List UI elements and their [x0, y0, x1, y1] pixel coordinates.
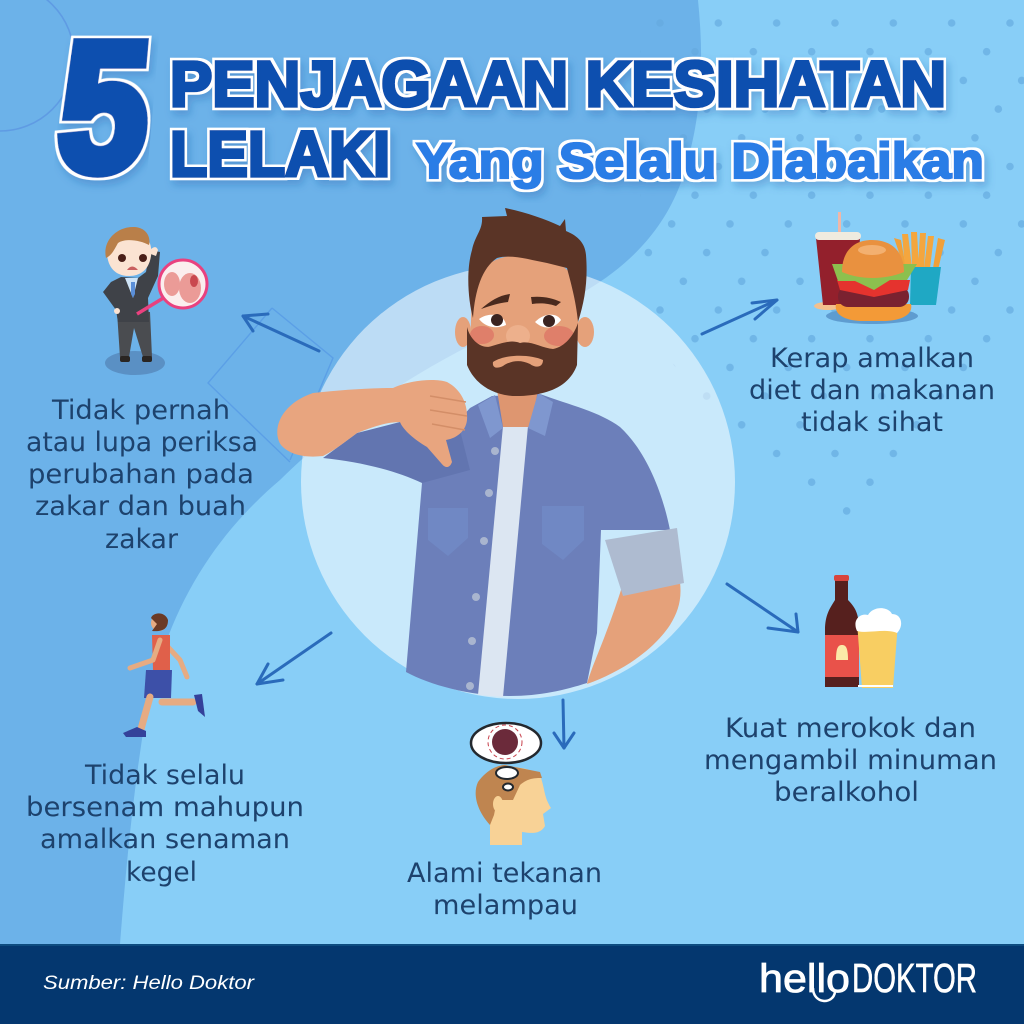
face — [470, 256, 579, 374]
text: testicle check: zakar dan buah — [35, 491, 246, 522]
text: unhealthy diet: tidak sihat — [801, 407, 943, 438]
hair — [476, 765, 542, 825]
burger — [836, 304, 911, 321]
arrow: to food — [702, 300, 777, 334]
pockets — [428, 508, 468, 556]
arrow: to stress — [554, 700, 574, 748]
t-shirt — [478, 426, 528, 697]
beard — [467, 323, 578, 396]
illustration: man thumbs down — [277, 208, 684, 697]
text: unhealthy diet: Kerap amalkan — [770, 343, 974, 374]
text: smoking and alcohol: Kuat merokok dan — [725, 713, 976, 744]
text: exercise: bersenam mahupun — [26, 792, 304, 823]
subheading: Yang Selalu Diabaikan — [416, 133, 984, 189]
text: testicle check: Tidak pernah — [51, 395, 230, 426]
central circle — [301, 265, 735, 699]
text: stress — [407, 858, 602, 921]
text: exercise: kegel — [126, 857, 197, 888]
cuff — [605, 528, 684, 596]
drink — [838, 212, 841, 236]
heading line 2: LELAKI — [170, 118, 390, 190]
collar — [478, 393, 553, 438]
decorative diamond outline — [208, 308, 333, 462]
head — [107, 230, 151, 276]
numeral 5: 5 — [52, 4, 157, 209]
source credit: Sumber: Hello Doktor — [43, 973, 255, 994]
icon: fast food — [814, 212, 945, 324]
trousers — [117, 312, 152, 357]
neck — [497, 390, 538, 427]
text: exercise — [26, 760, 304, 888]
buttons — [466, 447, 499, 690]
eyes — [479, 315, 506, 327]
text: unhealthy diet — [749, 343, 995, 438]
ears — [455, 317, 471, 347]
small bubbles — [496, 767, 518, 779]
face — [479, 767, 551, 845]
mouth — [493, 356, 543, 368]
magnifier — [137, 297, 165, 314]
text: testicle check — [26, 395, 258, 555]
fist fingers — [430, 396, 467, 430]
icon: stressed head — [471, 723, 551, 845]
text: testicle check: atau lupa periksa — [26, 427, 258, 458]
text: stress: Alami tekanan — [407, 858, 602, 889]
shirt — [406, 394, 670, 696]
icon: beer bottle and glass — [825, 575, 901, 688]
eyebrows — [481, 294, 561, 309]
text: exercise: Tidak selalu — [84, 760, 245, 791]
text: testicle check: perubahan pada — [28, 459, 254, 490]
logo — [759, 955, 977, 1001]
arrow: to exercise — [257, 633, 331, 684]
text: smoking and alcohol: mengambil minuman — [704, 745, 997, 776]
footer bar — [0, 944, 1024, 1024]
right forearm — [587, 582, 681, 684]
text: exercise: amalkan senaman — [40, 824, 290, 855]
left sleeve — [323, 422, 470, 483]
logo: DOKTOR — [852, 955, 977, 1001]
hair — [468, 208, 587, 322]
icon: running man — [123, 613, 205, 737]
cheeks — [470, 326, 494, 344]
arrow: to testicle check — [243, 314, 319, 351]
heading line 1: PENJAGAAN KESIHATAN — [170, 48, 946, 120]
text: smoking and alcohol — [704, 713, 997, 808]
text: testicle check: zakar — [105, 524, 179, 555]
jacket — [103, 250, 160, 322]
text: unhealthy diet: diet dan makanan — [749, 375, 995, 406]
fries — [894, 238, 945, 270]
text: smoking and alcohol: beralkohol — [774, 777, 919, 808]
left forearm and fist — [277, 380, 467, 467]
icon: worried man with magnifier — [103, 227, 207, 375]
arrow: to alcohol — [727, 584, 798, 632]
text: stress: melampau — [433, 890, 578, 921]
thought bubble — [471, 723, 541, 763]
nose — [506, 325, 530, 347]
title — [52, 4, 984, 209]
logo: hello — [759, 957, 850, 1001]
